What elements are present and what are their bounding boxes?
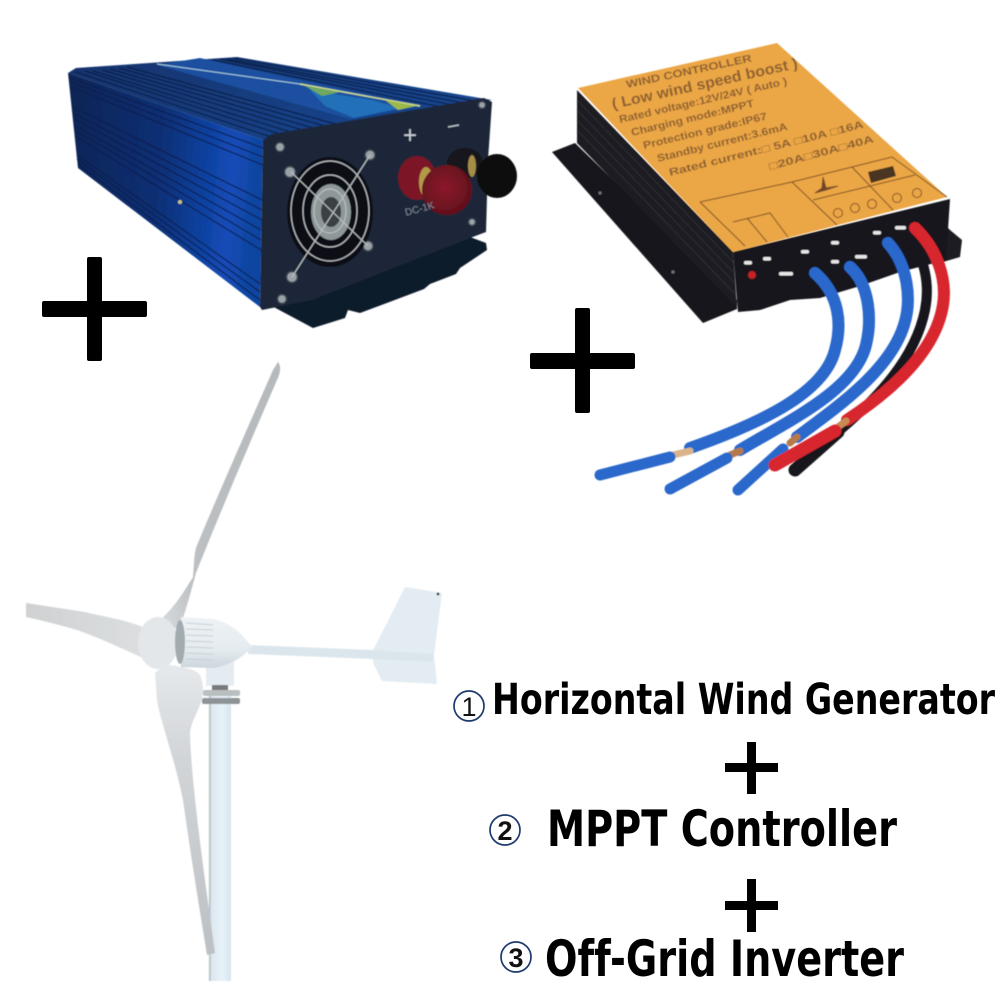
item 3: Off-Grid Inverter: Off-Grid Inverter bbox=[545, 930, 904, 988]
generator ribs bbox=[186, 623, 213, 660]
controller cables bbox=[600, 228, 944, 490]
terminal polarity marks bbox=[403, 122, 459, 219]
controller spec text: Rated voltage:12V/24V ( Auto ) bbox=[618, 76, 788, 126]
controller spec text: ( Low wind speed boost ) bbox=[610, 55, 799, 113]
inverter top face bbox=[68, 57, 492, 140]
vane dot bbox=[437, 593, 439, 595]
item 2: MPPT Controller: MPPT Controller bbox=[547, 800, 897, 858]
controller spec text: WIND CONTROLLER bbox=[625, 52, 753, 91]
wind turbine bbox=[26, 362, 442, 981]
controller spec text: Protection grade:IP67 bbox=[642, 111, 768, 152]
black cable bbox=[795, 237, 927, 470]
controller mounting flange bbox=[552, 143, 962, 323]
tower pole bbox=[209, 695, 231, 981]
hub bbox=[138, 617, 178, 669]
controller spec text: Charging mode:MPPT bbox=[630, 98, 756, 139]
lower blade bbox=[155, 665, 215, 955]
upper blade bbox=[147, 362, 280, 630]
screws bbox=[276, 102, 486, 304]
controller spec text: Rated current:□ 5A □10A □16A bbox=[668, 119, 865, 179]
red cable bbox=[775, 228, 944, 465]
nacelle bbox=[181, 617, 252, 668]
terminal polarity marks: DC-1K bbox=[404, 200, 436, 219]
controller product bbox=[552, 43, 962, 490]
plus sign middle bbox=[530, 308, 635, 413]
controller front with terminals bbox=[733, 199, 950, 312]
controller orange label bbox=[578, 43, 947, 252]
inverter side face with fins bbox=[68, 73, 263, 307]
bearing ring bbox=[175, 620, 185, 664]
inverter mounting bracket bbox=[270, 237, 487, 328]
inverter product bbox=[68, 57, 517, 328]
tail boom bbox=[248, 645, 433, 662]
positive terminal bbox=[398, 156, 472, 215]
item 2: MPPT Controller bbox=[490, 800, 897, 858]
tail vane bbox=[373, 587, 442, 684]
item 1: Horizontal Wind Generator: 1 bbox=[461, 692, 477, 722]
controller spec text: Standby current:3.6mA bbox=[656, 121, 789, 165]
inverter front panel bbox=[260, 98, 492, 310]
cooling fan with grill bbox=[287, 155, 373, 277]
controller side bbox=[577, 90, 737, 308]
blue cable two bbox=[670, 267, 869, 489]
small plus one bbox=[725, 742, 778, 794]
component list bbox=[454, 676, 995, 988]
negative terminal bbox=[447, 148, 517, 198]
controller label wiring diagram bbox=[700, 157, 947, 246]
yaw neck and flange bbox=[202, 662, 240, 704]
blue cable three bbox=[738, 243, 908, 490]
terminal polarity marks: + bbox=[403, 122, 417, 149]
blue cable one bbox=[600, 273, 838, 475]
item 2: MPPT Controller: 2 bbox=[497, 816, 513, 846]
small plus two bbox=[725, 879, 778, 932]
item 3: Off-Grid Inverter: 3 bbox=[508, 943, 524, 973]
left blade bbox=[26, 603, 145, 658]
controller spec text bbox=[610, 52, 876, 179]
plus sign left bbox=[42, 257, 147, 361]
controller spec text: □20A□30A□40A bbox=[768, 133, 876, 173]
